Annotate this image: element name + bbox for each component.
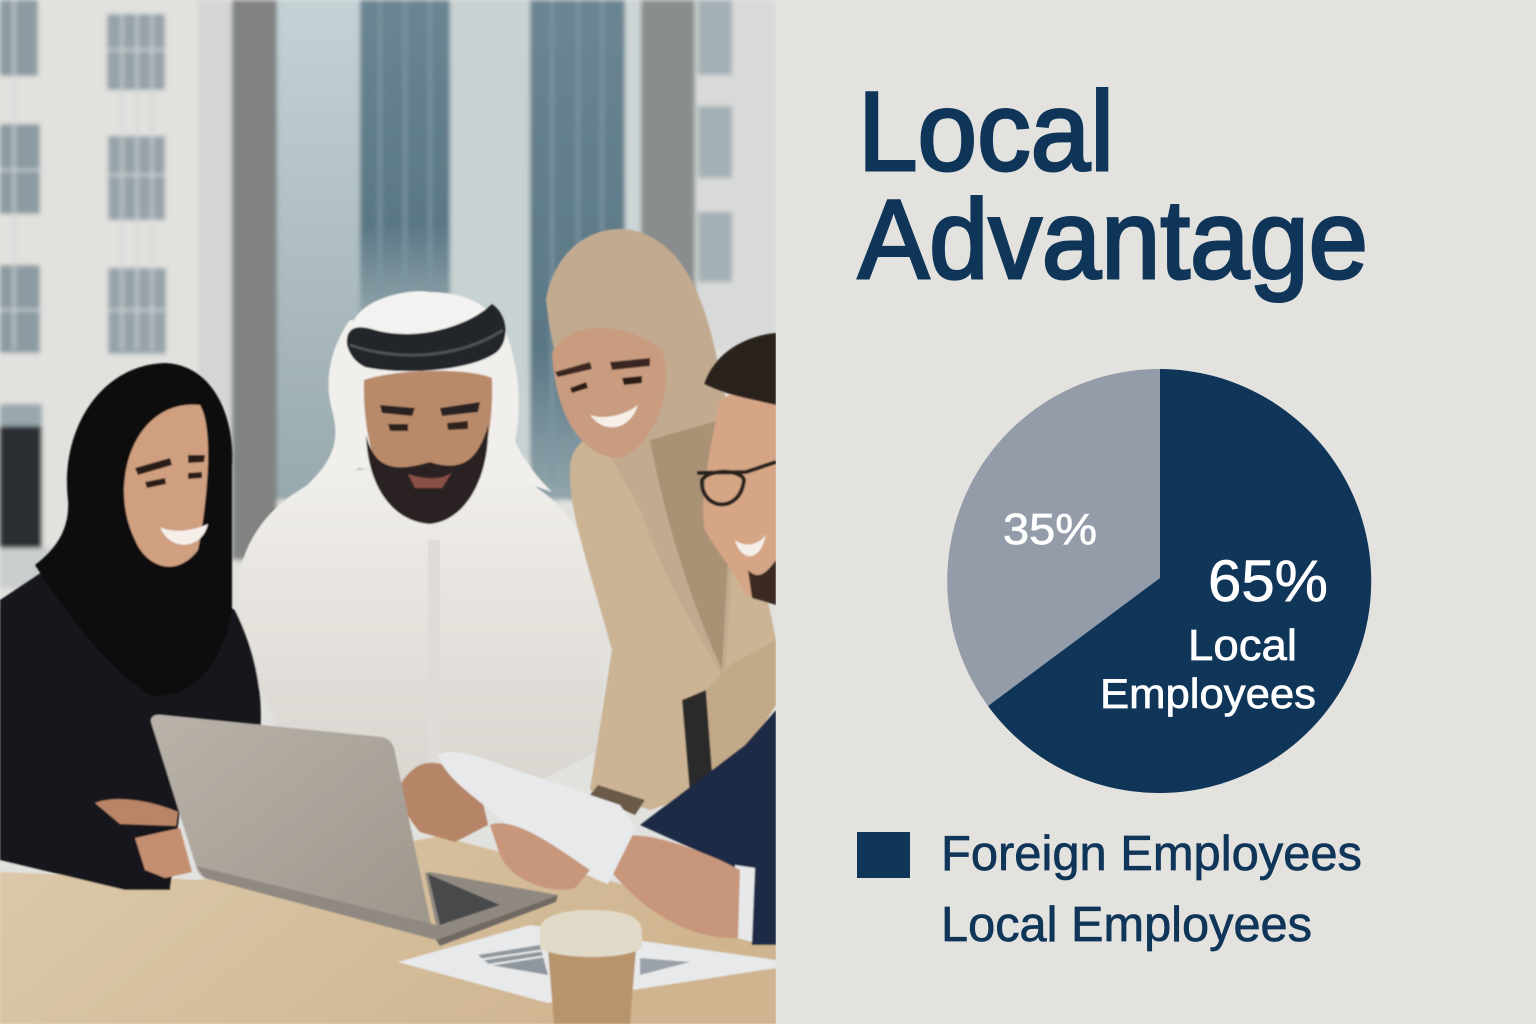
laptop <box>151 715 558 946</box>
label: 65% Local Employees: Employees <box>1100 670 1316 717</box>
heading: Local Advantage: Local <box>858 69 1114 194</box>
panel: office team photo <box>0 0 776 1024</box>
person: man with glasses <box>595 333 776 945</box>
coffee cup <box>540 910 642 1024</box>
label: 35%: 35% <box>1003 505 1097 554</box>
legend item: local employees: Local Employees <box>941 898 1312 952</box>
label: 65% Local Employees: Local <box>1188 621 1297 670</box>
label: 65% Local Employees <box>1100 549 1328 717</box>
heading: Local Advantage <box>858 69 1368 302</box>
person: woman in black hijab <box>0 363 261 890</box>
table <box>0 836 776 1024</box>
legend swatch <box>857 832 910 878</box>
heading: Local Advantage: Advantage <box>858 177 1368 302</box>
legend item: foreign employees: Foreign Employees <box>941 827 1362 881</box>
legend <box>857 827 1362 952</box>
person: woman in beige hijab <box>546 229 776 815</box>
pie chart <box>947 369 1371 793</box>
document in hand <box>438 752 636 890</box>
paper on table <box>398 925 776 1003</box>
slice: local employees 65% <box>988 369 1371 793</box>
person: man in white kandura <box>235 291 606 842</box>
panel: right background <box>776 0 1536 1024</box>
slice: foreign employees 35% <box>947 369 1160 706</box>
label: 65% Local Employees: 65% <box>1208 549 1328 614</box>
office window background <box>0 0 776 1024</box>
